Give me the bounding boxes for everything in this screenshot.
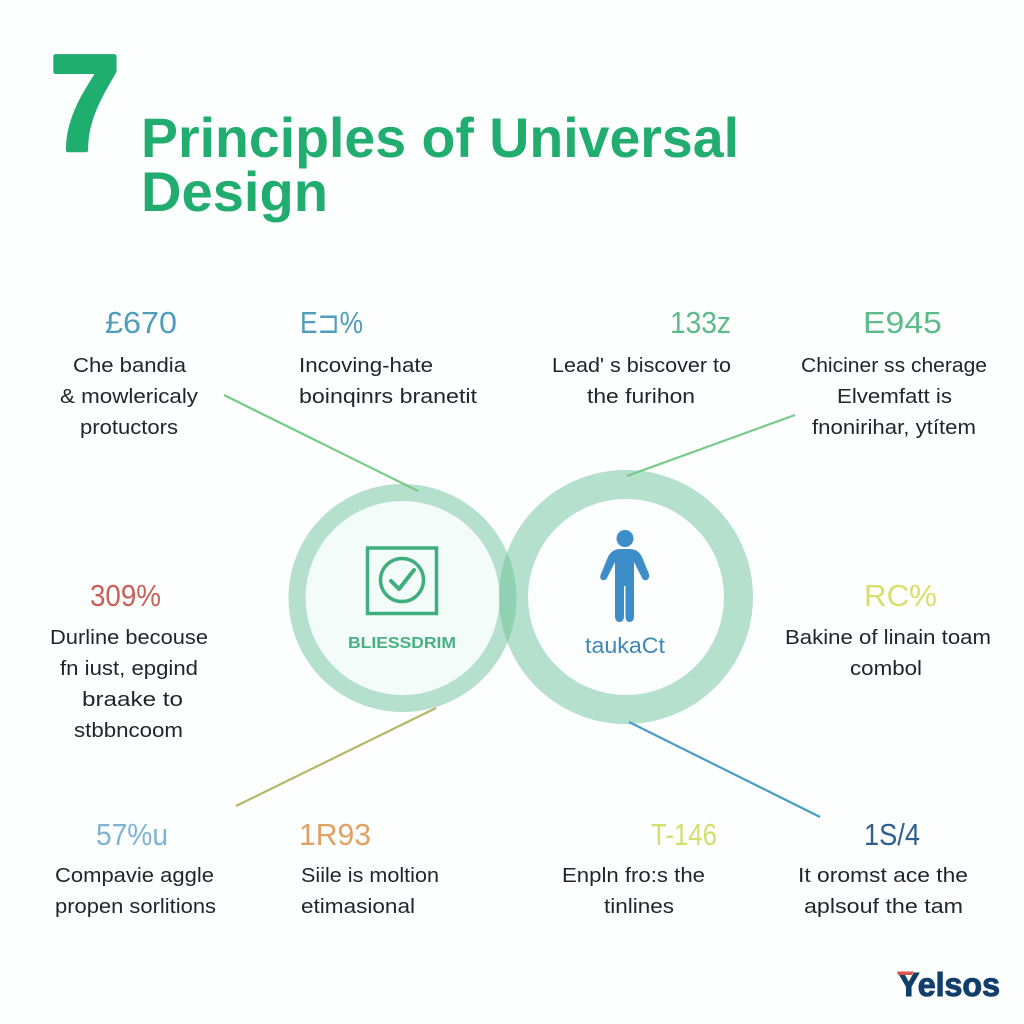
connector: bottom right bbox=[629, 722, 820, 817]
stat: middle left: braake to bbox=[82, 688, 183, 711]
panel: right circle bbox=[514, 484, 738, 710]
stat: top row 1: & mowlericaly bbox=[60, 385, 199, 408]
stat: top row 1: Che bandia bbox=[73, 354, 187, 377]
stat: top row 4: Chiciner ss cherage bbox=[801, 354, 987, 377]
stat: bottom row 2: etimasional bbox=[301, 895, 415, 918]
title: numeral seven: 7 bbox=[50, 27, 120, 179]
connector: top right bbox=[627, 415, 795, 476]
stat: bottom row 3: tinlines bbox=[604, 895, 674, 918]
stat: middle left: stbbncoom bbox=[74, 719, 183, 742]
stat: top row 2: E⊐% bbox=[300, 305, 363, 340]
icon: person bbox=[600, 530, 649, 622]
stat: middle left bbox=[50, 578, 208, 742]
stat: middle left: 309% bbox=[90, 578, 161, 613]
stat: bottom row 3: Enpln fro:s the bbox=[562, 864, 705, 887]
connector: bottom left bbox=[236, 708, 436, 806]
stat: top row 2: Incoving-hate bbox=[299, 354, 433, 377]
connector: top left bbox=[224, 395, 418, 491]
stat: bottom row 4: aplsouf the tam bbox=[804, 895, 963, 918]
stat: bottom row 3: T-146 bbox=[651, 817, 717, 852]
icon: check mark in square bbox=[368, 548, 436, 614]
stat: bottom row 2: Siile is moltion bbox=[301, 864, 439, 887]
panel: left circle bbox=[297, 492, 508, 704]
stat: top row 3: Lead' s biscover to bbox=[552, 354, 731, 377]
stat: bottom row 1 bbox=[55, 817, 216, 918]
stat: bottom row 2: 1R93 bbox=[299, 817, 371, 852]
stat: middle left: Durline becouse bbox=[50, 626, 208, 649]
stat: bottom row 4: 1S/4 bbox=[864, 817, 920, 852]
stat: middle right: RC% bbox=[864, 578, 937, 613]
stat: middle right bbox=[785, 578, 991, 680]
stat: top row 3: the furihon bbox=[587, 385, 695, 408]
stat: top row 4: Elvemfatt is bbox=[837, 385, 952, 408]
stat: top row 4 bbox=[801, 305, 987, 439]
title: heading bbox=[141, 106, 739, 223]
stat: top row 1: protuctors bbox=[80, 416, 178, 439]
stat: top row 3 bbox=[552, 305, 731, 408]
stat: middle right: Bakine of linain toam bbox=[785, 626, 991, 649]
stat: top row 1: £670 bbox=[105, 305, 177, 340]
stat: bottom row 3 bbox=[562, 817, 717, 918]
stat: bottom row 4: It oromst ace the bbox=[798, 864, 968, 887]
stat: top row 4: fnonirihar, ytítem bbox=[812, 416, 976, 439]
stat: bottom row 1: Compavie aggle bbox=[55, 864, 214, 887]
stat: bottom row 4 bbox=[798, 817, 968, 918]
title: heading: Principles of Universal bbox=[141, 106, 739, 169]
stat: top row 2 bbox=[299, 305, 477, 408]
stat: middle right: combol bbox=[850, 657, 922, 680]
stat: bottom row 2 bbox=[299, 817, 439, 918]
left circle label: BLIESSDRIM bbox=[348, 635, 456, 652]
title: heading: Design bbox=[141, 160, 328, 223]
stat: middle left: fn iust, epgind bbox=[60, 657, 198, 680]
stat: top row 3: 133z bbox=[670, 305, 731, 340]
stat: bottom row 1: 57%u bbox=[96, 817, 168, 852]
right circle label: taukaCt bbox=[585, 633, 665, 658]
stat: bottom row 1: propen sorlitions bbox=[55, 895, 216, 918]
stat: top row 1 bbox=[60, 305, 199, 439]
stat: top row 4: E945 bbox=[863, 305, 942, 340]
logo: Yelsos bbox=[898, 966, 1000, 1003]
stat: top row 2: boinqinrs branetit bbox=[299, 385, 477, 408]
